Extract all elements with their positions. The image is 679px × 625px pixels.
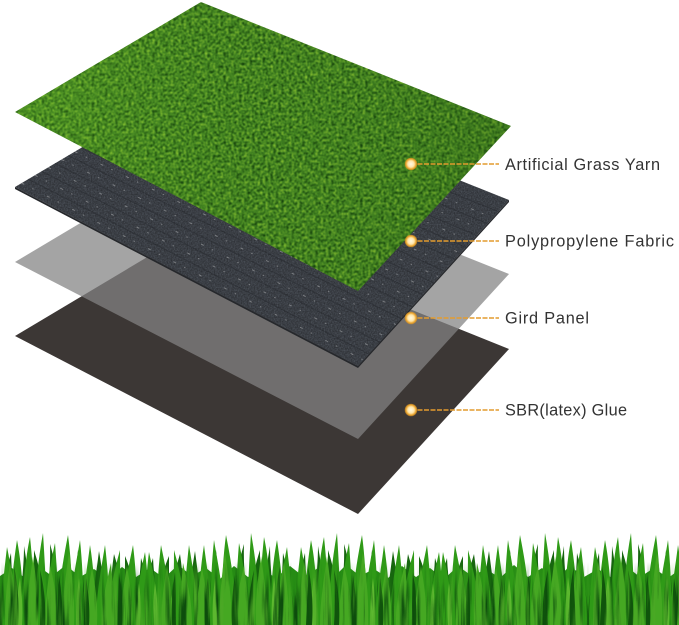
callout: SBR(latex) Glue bbox=[405, 402, 627, 420]
callout: Gird Panel: Gird Panel bbox=[505, 310, 589, 328]
callout: Artificial Grass Yarn: Artificial Grass Yarn bbox=[505, 156, 660, 174]
layer: artificial grass yarn bbox=[15, 2, 511, 291]
layer: SBR latex glue sheet bbox=[15, 225, 509, 514]
callout: Polypropylene Fabric: Polypropylene Fabric bbox=[505, 232, 674, 250]
layer: grid panel bbox=[15, 151, 509, 439]
layer: polypropylene fabric bbox=[15, 77, 509, 368]
decorative grass strip bbox=[0, 533, 679, 625]
callout: SBR(latex) Glue: SBR(latex) Glue bbox=[505, 402, 627, 420]
callout: Artificial Grass Yarn bbox=[405, 156, 660, 174]
callout: Polypropylene Fabric bbox=[405, 232, 674, 250]
callout: Gird Panel bbox=[405, 310, 589, 328]
